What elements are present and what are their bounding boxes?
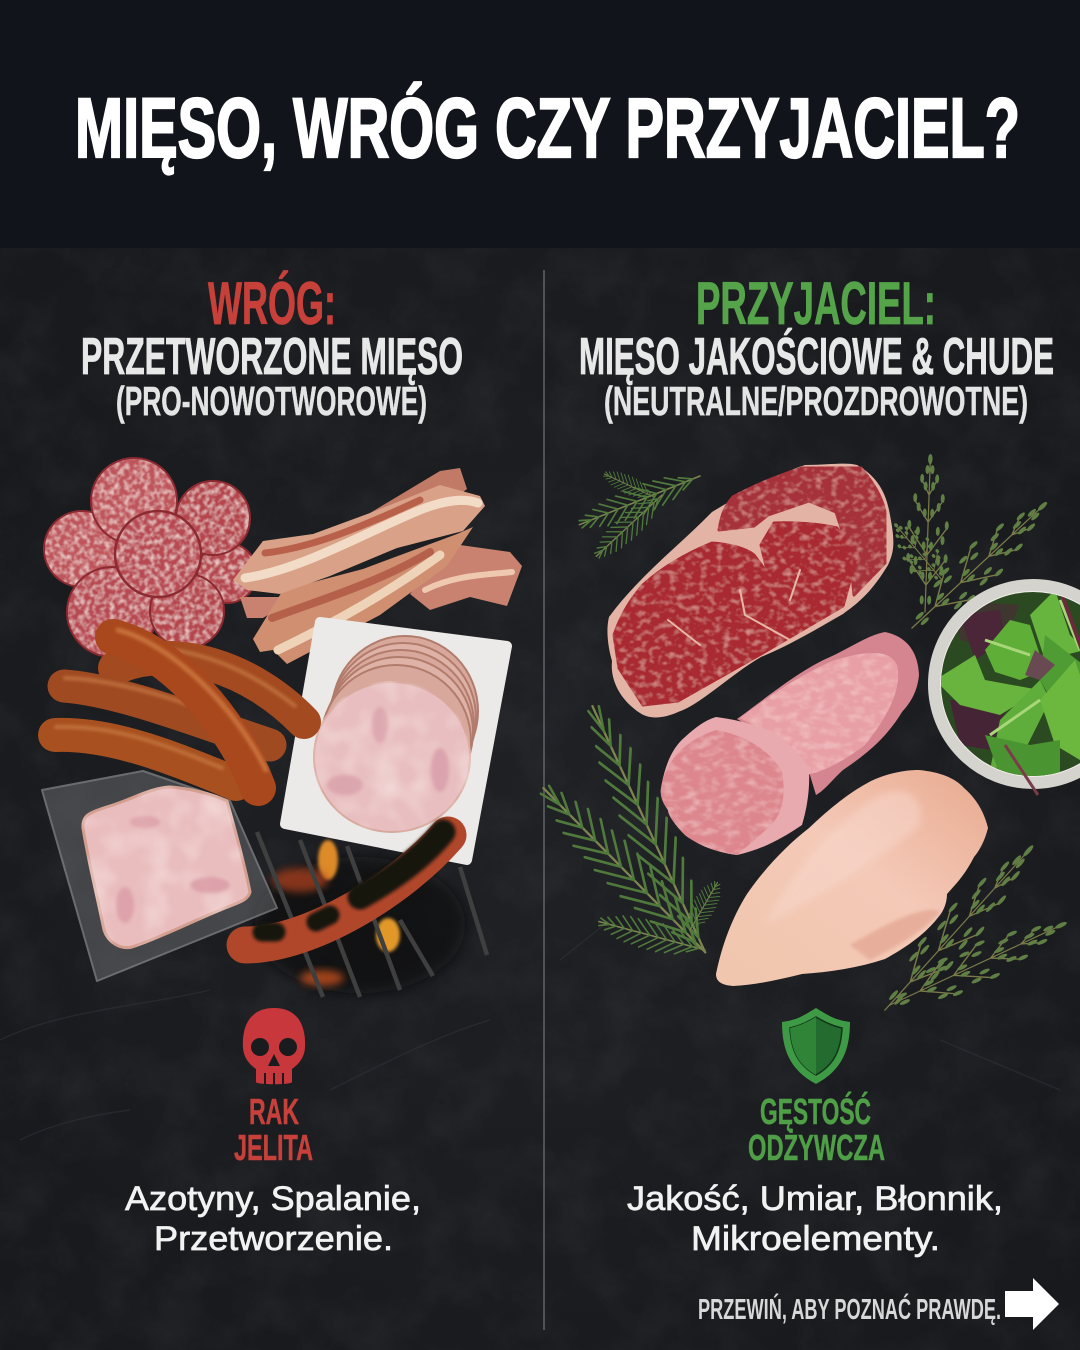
friend description: Mikroelementy. (691, 1220, 940, 1258)
enemy outcome label (234, 1091, 313, 1168)
enemy description: Azotyny, Spalanie, (125, 1180, 421, 1218)
friend label: PRZYJACIEL: (696, 270, 936, 337)
arrow (1005, 1278, 1059, 1330)
bacon strips (233, 468, 522, 664)
enemy subtitle: PRZETWORZONE MIĘSO (81, 328, 463, 386)
processed meats illustration (42, 458, 522, 997)
enemy outcome label: JELITA (234, 1127, 313, 1168)
heading: enemy (81, 270, 463, 424)
rosemary top (574, 463, 705, 565)
thyme top right (882, 453, 1061, 643)
heading: friend (579, 270, 1054, 424)
sausages (55, 630, 304, 788)
friend outcome label: ODŻYWCZA (748, 1127, 885, 1168)
friend outcome label: GĘSTOŚĆ (760, 1090, 871, 1132)
icon: skull (243, 1008, 305, 1085)
fresh meats illustration (529, 453, 1080, 1023)
grill and fire (255, 832, 487, 997)
icon: shield (782, 1008, 850, 1084)
friend description (627, 1180, 1003, 1258)
pork loin slices (661, 632, 919, 855)
enemy label: WRÓG: (208, 270, 336, 337)
friend outcome label (748, 1090, 885, 1168)
enemy outcome label: RAK (249, 1091, 299, 1132)
header background (0, 0, 1080, 250)
ham tray (285, 622, 507, 860)
enemy description (125, 1180, 421, 1258)
vacuum pack ham (42, 771, 277, 981)
enemy qualifier: (PRO-NOWOTWOROWE) (116, 378, 427, 424)
friend description: Jakość, Umiar, Błonnik, (627, 1180, 1003, 1218)
charred sausage (245, 832, 448, 945)
chicken breast (716, 770, 988, 986)
thyme lower right (870, 832, 1075, 1023)
rosemary lower left (529, 698, 727, 967)
salami slices (44, 458, 257, 657)
salad bowl (934, 585, 1080, 795)
ribeye steak (607, 464, 893, 717)
enemy description: Przetworzenie. (154, 1220, 393, 1258)
